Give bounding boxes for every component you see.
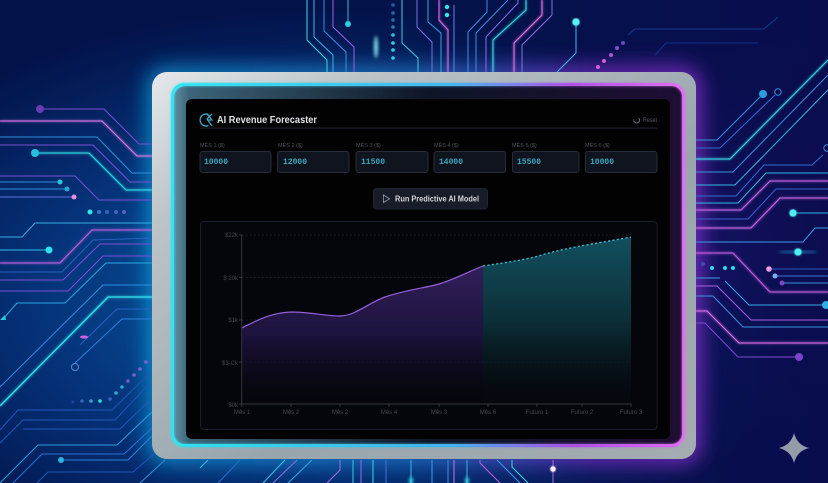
x axis labels: Futuro 1 [526,410,549,416]
input: month 3: 11500 [361,158,385,167]
x axis labels: Mês 1 [234,410,251,416]
x axis labels: Mês 3 [431,410,448,416]
input: month 1: MÊS 1 ($) [200,141,225,149]
input: month 3 [356,141,428,172]
y axis labels: $0k [228,403,239,409]
circuit traces: top [307,0,576,72]
title: AI Revenue Forecaster [217,114,317,126]
neon border [172,84,684,446]
input: month 4 [434,141,506,172]
circuit nodes: top [345,3,625,69]
historic revenue area [242,266,483,404]
x axis labels: Mês 4 [381,410,398,416]
x axis labels: Futuro 3 [620,410,643,416]
x axis labels: Futuro 2 [571,410,594,416]
input: month 5: 15500 [517,158,541,167]
screen bezel [174,86,683,447]
circuit nodes: bottom [409,466,556,483]
circuit traces: bottom [200,460,553,483]
input: month 3: MÊS 3 ($) [356,141,381,149]
reset button: Reset [643,118,657,124]
axes [239,235,632,407]
input: month 6: MÊS 6 ($) [585,141,610,149]
input: month 4: MÊS 4 ($) [434,141,459,149]
grid lines [242,235,631,362]
metal frame [152,72,696,459]
input: month 5 [512,141,579,172]
x axis labels: Mês 2 [332,410,349,416]
input: month 5: MÊS 5 ($) [512,141,537,149]
input: month 6: 10000 [590,158,614,167]
reset button [634,118,657,124]
input: month 1 [200,141,271,172]
x axis labels: Mês 6 [480,410,497,416]
input: month 1: 10000 [204,158,228,167]
input row [200,141,657,172]
forecast dashed line [483,237,631,266]
input: month 2: 12000 [283,158,307,167]
y axis labels [222,233,239,409]
icon: sparkle watermark [779,433,809,463]
area chart [222,233,643,416]
input: month 2: MÊS 2 ($) [278,141,303,149]
historic revenue line [242,266,483,328]
y axis labels: $ 20k [223,276,239,282]
run model button: Run Predictive AI Model [395,194,479,204]
input: month 2 [278,141,349,172]
circuit nodes: right side [701,89,828,361]
y axis labels: $1k [228,318,239,324]
circuit traces: right side [628,17,828,357]
y axis labels: $3-Ck [222,361,239,367]
tablet glow [146,66,702,465]
input: month 4: 14000 [439,158,463,167]
input: month 6 [585,141,657,172]
x axis labels: Mês 2 [283,410,300,416]
x axis labels [234,410,643,416]
circuit traces: left side [0,109,165,483]
y axis labels: $22k [225,233,239,239]
circuit nodes: left side [0,105,148,463]
forecast area [483,237,631,404]
chart panel [200,222,657,430]
header [200,114,657,129]
icon: forecaster logo [200,114,212,126]
run model button [374,188,488,209]
dark screen [186,99,670,439]
